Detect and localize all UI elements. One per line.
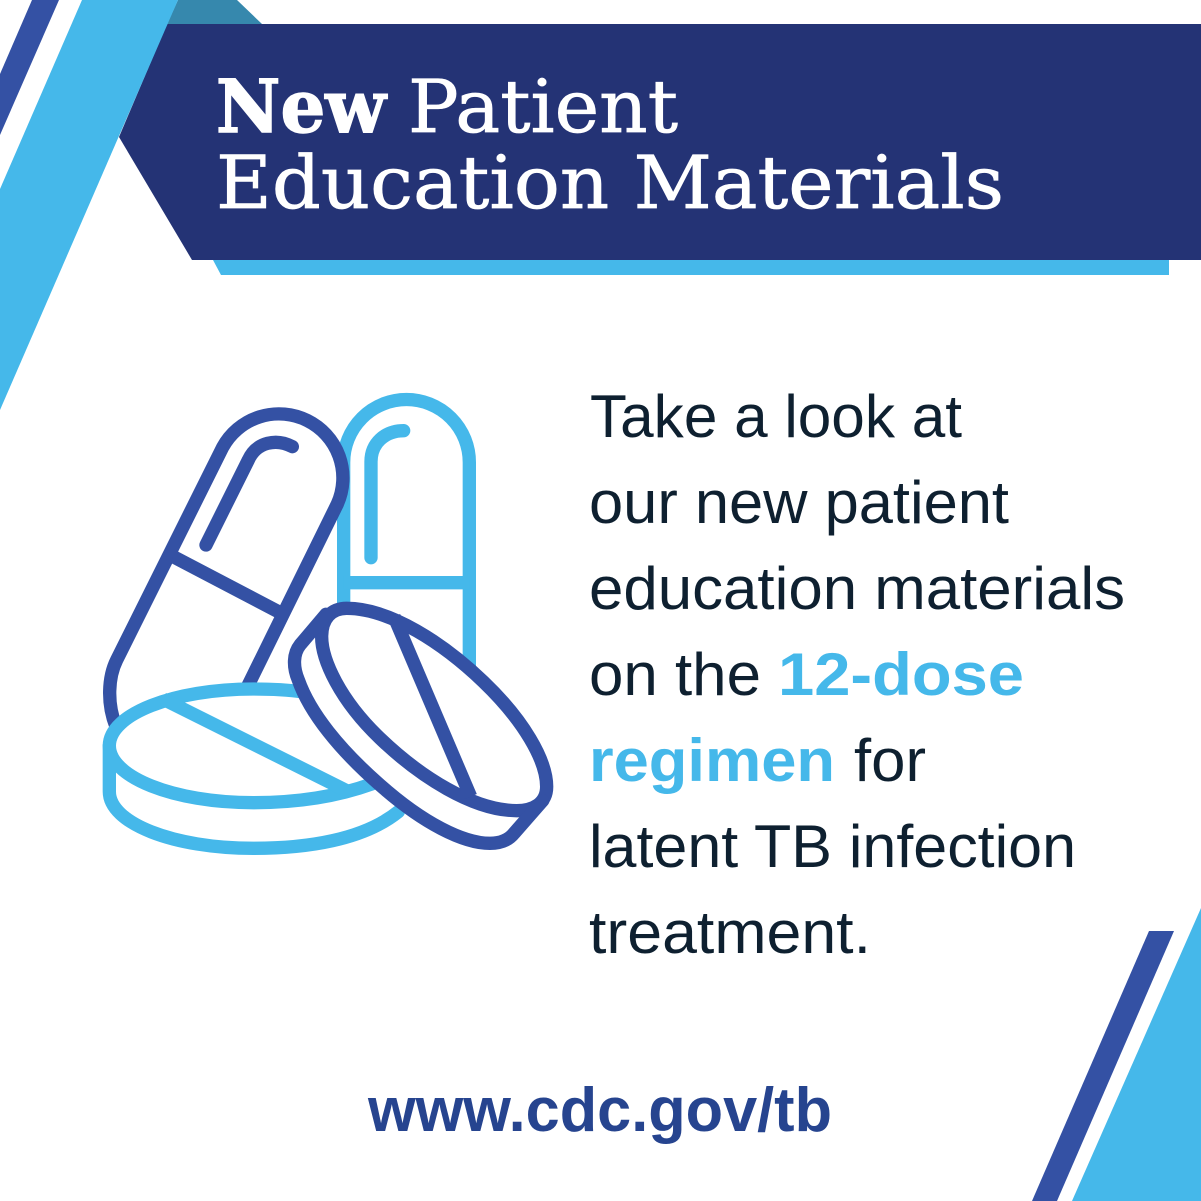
light blue underline of banner xyxy=(213,260,1169,275)
body text: latent TB infection xyxy=(589,813,1076,880)
body text: education materials xyxy=(589,555,1125,622)
icon: pills and tablets xyxy=(109,399,547,848)
teal tab behind banner xyxy=(167,0,262,24)
title: New xyxy=(216,64,388,150)
body text xyxy=(589,383,1125,966)
top-left dark blue stripe xyxy=(0,0,59,135)
bottom-right light blue triangle xyxy=(1072,908,1201,1201)
website url: www.cdc.gov/tb xyxy=(367,1076,832,1145)
top-left light blue stripe xyxy=(0,0,178,410)
title: Education Materials xyxy=(216,141,1004,226)
icon: light blue tablet xyxy=(109,689,398,848)
body text: for xyxy=(854,727,926,794)
body text: our new patient xyxy=(589,469,1009,536)
title: Patient xyxy=(408,65,678,150)
icon: light blue capsule xyxy=(344,399,469,713)
body text: 12-dose xyxy=(778,641,1024,708)
bottom-right dark blue stripe xyxy=(1032,931,1174,1201)
body text: Take a look at xyxy=(590,383,962,450)
body text: on the xyxy=(589,641,761,708)
title banner xyxy=(119,24,1201,260)
icon: dark blue capsule xyxy=(110,414,343,727)
body text: regimen xyxy=(589,727,835,794)
icon: dark blue tablet xyxy=(294,608,547,843)
title xyxy=(216,64,1004,226)
body text: treatment. xyxy=(589,899,871,966)
